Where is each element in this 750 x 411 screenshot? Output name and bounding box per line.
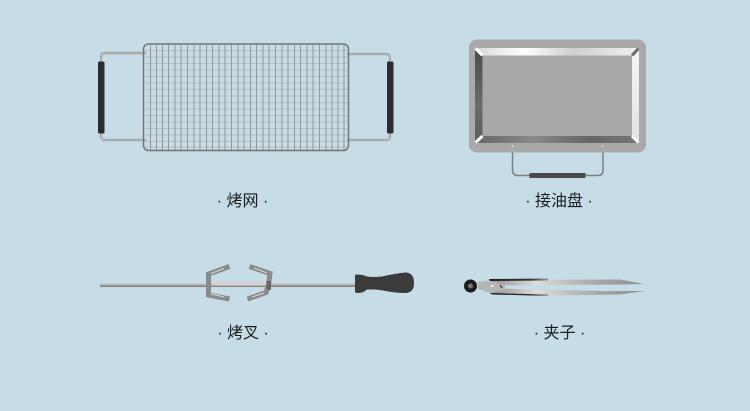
right handle wire highlight <box>347 54 390 140</box>
lower arm <box>490 288 645 296</box>
tray rivets <box>512 145 513 147</box>
tray floor <box>482 56 632 136</box>
right handle wire <box>347 54 390 140</box>
rack frame <box>144 44 348 150</box>
left handle wire <box>101 53 146 140</box>
icon: tongs <box>466 278 645 296</box>
tray rim <box>469 40 646 152</box>
vertical wires <box>150 45 344 150</box>
icon: roasting fork <box>100 266 414 299</box>
hinge plate <box>478 280 505 293</box>
left prong highlights <box>211 268 224 297</box>
hanging ring <box>466 282 475 290</box>
label: roasting fork: · 烤叉 · <box>217 324 269 342</box>
tray handle grip <box>530 173 586 178</box>
left handle wire highlight <box>101 53 146 140</box>
rivet <box>491 285 493 287</box>
tray handle wire <box>512 152 603 176</box>
tray corners <box>476 48 638 142</box>
label: grill rack: · 烤网 · <box>217 192 268 210</box>
spit rod <box>100 283 357 287</box>
left black grip <box>98 62 104 134</box>
upper dark grip <box>489 278 548 281</box>
right prong highlights <box>252 268 267 297</box>
lock tab <box>500 285 502 288</box>
tray top bevel <box>475 48 639 56</box>
label: drip tray: · 接油盘 · <box>525 191 593 210</box>
black handle <box>355 272 414 293</box>
right black grip <box>387 62 394 134</box>
icon: drip tray <box>469 40 646 178</box>
right prongs <box>248 266 270 299</box>
fork hub <box>266 281 271 290</box>
lower dark grip <box>490 293 548 296</box>
tray left bevel <box>475 48 482 143</box>
horizontal wires <box>145 50 348 147</box>
left prongs <box>208 266 230 299</box>
tray right bevel <box>632 48 639 143</box>
icon: grill rack <box>98 44 394 150</box>
spit rod centre highlight <box>212 282 268 286</box>
label: tongs: · 夹子 · <box>534 324 585 342</box>
upper arm <box>489 280 644 286</box>
tray bottom bevel <box>475 136 639 143</box>
